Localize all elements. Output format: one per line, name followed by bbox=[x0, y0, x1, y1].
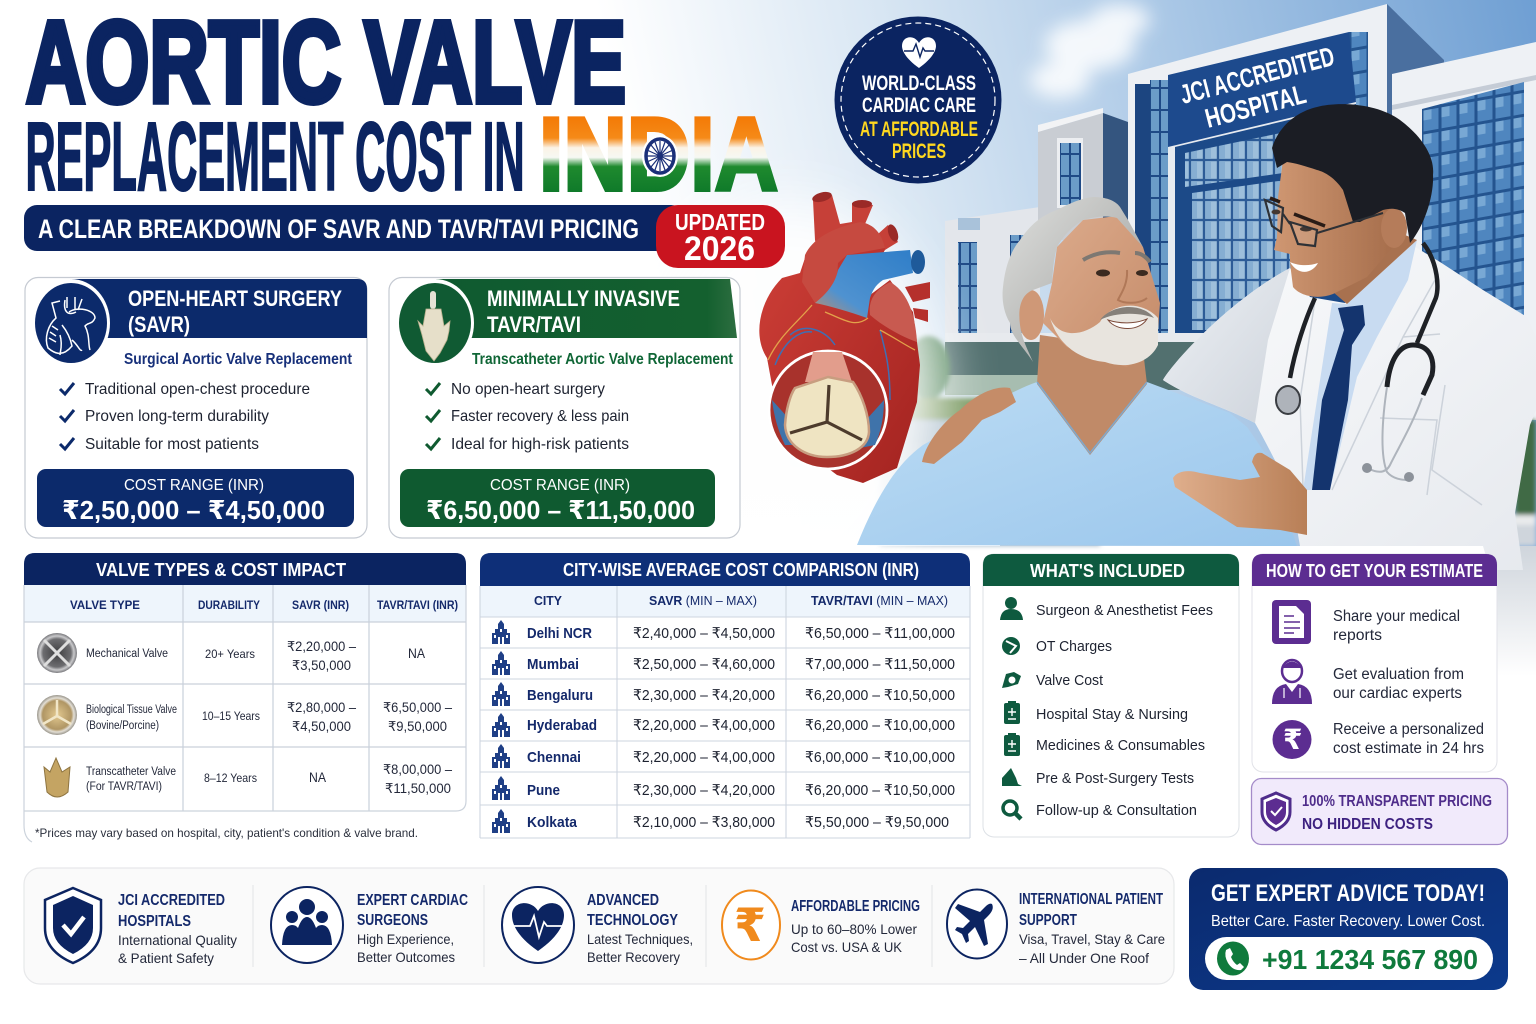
panel: trust strip bbox=[24, 868, 1174, 984]
table column headers: SAVR (INR) bbox=[292, 598, 349, 612]
city table heading bbox=[480, 553, 970, 586]
row: Chennai bbox=[492, 744, 955, 768]
icon: mechanical valve bbox=[37, 633, 77, 673]
table column headers: VALVE TYPE bbox=[70, 598, 140, 612]
TAVR benefit list bbox=[426, 381, 629, 453]
icon: shield bbox=[1262, 793, 1290, 830]
table heading bbox=[24, 553, 466, 585]
row: Delhi NCR: ₹2,40,000 – ₹4,50,000 bbox=[633, 625, 775, 642]
icon: rupee bbox=[1272, 720, 1312, 759]
table column headers: TAVR/TAVI (INR) bbox=[377, 598, 458, 612]
panel: how to get your estimate bbox=[1252, 554, 1497, 772]
hospital sign: HOSPITAL bbox=[1202, 79, 1309, 134]
row: Delhi NCR: Delhi NCR bbox=[527, 625, 592, 642]
row: Hyderabad bbox=[492, 713, 955, 737]
item: affordable pricing: AFFORDABLE PRICING bbox=[791, 898, 920, 915]
item: advanced technology: ADVANCED bbox=[587, 892, 659, 909]
row: Bengaluru: ₹6,20,000 – ₹10,50,000 bbox=[805, 687, 955, 704]
item: expert surgeons: High Experience, bbox=[357, 931, 454, 947]
included items: OT Charges bbox=[1036, 638, 1112, 655]
row: biological valve: ₹6,50,000 – bbox=[383, 700, 452, 715]
heart vessels bbox=[813, 195, 898, 300]
row: Bengaluru: ₹2,30,000 – ₹4,20,000 bbox=[633, 687, 775, 704]
item: advanced technology: Better Recovery bbox=[587, 949, 680, 965]
heart right lobe bbox=[870, 282, 917, 342]
illustration: doctor bbox=[1163, 104, 1536, 570]
row: Hyderabad: Hyderabad bbox=[527, 717, 597, 734]
pulmonary artery bbox=[815, 250, 913, 318]
patient ear bbox=[1018, 290, 1044, 340]
panel: TAVR card: TAVR/TAVI bbox=[487, 312, 581, 337]
row: transcatheter valve: NA bbox=[309, 769, 327, 785]
icon: follow-up magnifier bbox=[1003, 801, 1021, 819]
row: Kolkata bbox=[492, 809, 949, 833]
panel: SAVR card: (SAVR) bbox=[128, 312, 190, 337]
TAVR benefit list: Faster recovery & less pain bbox=[451, 408, 629, 425]
haze bbox=[640, 200, 940, 600]
SAVR subtitle: Surgical Aortic Valve Replacement bbox=[124, 351, 352, 368]
panel: what's included: WHAT'S INCLUDED bbox=[1030, 560, 1185, 581]
item: expert surgeons: SURGEONS bbox=[357, 912, 428, 929]
table column headers: DURABILITY bbox=[198, 598, 260, 612]
coronary vessels bbox=[775, 328, 890, 400]
icon: rupee: ₹ bbox=[1283, 724, 1302, 755]
row: transcatheter valve: ₹11,50,000 bbox=[385, 781, 451, 796]
callout: transparent pricing: 100% TRANSPARENT PRICING bbox=[1302, 793, 1492, 810]
item: international support: – All Under One Roof bbox=[1019, 950, 1149, 966]
included items: Pre & Post-Surgery Tests bbox=[1036, 770, 1194, 787]
row: biological valve: ₹4,50,000 bbox=[292, 719, 351, 734]
SAVR benefit list: Proven long-term durability bbox=[85, 408, 269, 425]
row: mechanical valve: ₹2,20,000 – bbox=[287, 639, 356, 654]
panel: city-wise table: CITY-WISE AVERAGE COST COMPARISON (INR) bbox=[563, 560, 919, 580]
row: Chennai: ₹6,00,000 – ₹10,00,000 bbox=[805, 749, 955, 766]
TAVR cost box bbox=[400, 469, 715, 527]
hair bbox=[1272, 104, 1433, 243]
icon: orange rupee bbox=[722, 890, 780, 960]
panel: valve types table: VALVE TYPES & COST IMPACT bbox=[96, 559, 347, 580]
panel: how to get your estimate: HOW TO GET YOUR ESTIMATE bbox=[1266, 560, 1483, 581]
row: biological valve bbox=[37, 695, 452, 735]
valve inset bbox=[769, 351, 887, 469]
icon: phone bbox=[1217, 942, 1249, 976]
TAVR header bbox=[436, 279, 737, 338]
row: Hyderabad: ₹2,20,000 – ₹4,00,000 bbox=[633, 717, 775, 734]
row: Pune: ₹2,30,000 – ₹4,20,000 bbox=[633, 782, 775, 799]
title line one: AORTIC VALVE bbox=[26, 0, 626, 127]
item: JCI accredited: JCI ACCREDITED bbox=[118, 892, 225, 909]
step: share reports: reports bbox=[1333, 627, 1382, 644]
included items: Medicines & Consumables bbox=[1036, 737, 1205, 754]
panel: call to action: Better Care. Faster Recovery. Lower Cost. bbox=[1211, 913, 1485, 930]
icon: OT charges bbox=[1002, 637, 1020, 655]
phone pill bbox=[1205, 937, 1493, 980]
icon: orange rupee: ₹ bbox=[734, 899, 766, 951]
neckline bbox=[1037, 382, 1147, 453]
doctor coat bbox=[1163, 245, 1536, 570]
city table column headers: SAVR (MIN – MAX) bbox=[649, 594, 757, 608]
icon: people bbox=[271, 887, 343, 963]
row: Mumbai: ₹2,50,000 – ₹4,60,000 bbox=[633, 656, 775, 673]
stethoscope bbox=[1276, 243, 1437, 482]
panel: SAVR card: OPEN-HEART SURGERY bbox=[128, 286, 342, 311]
badge: world-class care bbox=[834, 16, 1002, 184]
patient hair bbox=[1003, 197, 1143, 362]
step: evaluation bbox=[1272, 660, 1464, 704]
panel: TAVR card: MINIMALLY INVASIVE bbox=[487, 286, 680, 311]
callout: transparent pricing bbox=[1252, 778, 1508, 844]
included items: Hospital Stay & Nursing bbox=[1036, 706, 1188, 723]
item: advanced technology bbox=[502, 887, 693, 965]
badge: world-class care: CARDIAC CARE bbox=[862, 94, 976, 117]
included heading bbox=[983, 554, 1239, 586]
item: JCI accredited bbox=[45, 888, 237, 966]
subtitle banner: A CLEAR BREAKDOWN OF SAVR AND TAVR/TAVI PRICING bbox=[38, 214, 639, 244]
row: Delhi NCR bbox=[492, 620, 955, 644]
included items bbox=[1000, 597, 1213, 819]
item: expert surgeons bbox=[271, 887, 468, 965]
TAVR benefit list: No open-heart surgery bbox=[451, 381, 605, 398]
updated badge: 2026 bbox=[684, 230, 755, 268]
item: international support: Visa, Travel, Stay & Care bbox=[1019, 931, 1165, 947]
row: transcatheter valve: Transcatheter Valve bbox=[86, 766, 176, 778]
row: Kolkata: Kolkata bbox=[527, 814, 578, 831]
item: expert surgeons: Better Outcomes bbox=[357, 949, 455, 965]
row: Mumbai: ₹7,00,000 – ₹11,50,000 bbox=[805, 656, 955, 673]
badge: world-class care: WORLD-CLASS bbox=[862, 72, 976, 95]
panel: valve types table bbox=[24, 553, 466, 842]
panel: call to action bbox=[1189, 868, 1508, 990]
doctor features bbox=[1265, 198, 1383, 272]
aortic arch bbox=[802, 222, 885, 303]
row: Delhi NCR: ₹6,50,000 – ₹11,00,000 bbox=[805, 625, 955, 642]
row: Mumbai: Mumbai bbox=[527, 656, 579, 673]
icon: heart anatomy bbox=[32, 279, 110, 367]
title: REPLACEMENT COST IN bbox=[26, 102, 524, 211]
icon: document bbox=[1272, 600, 1311, 644]
tie bbox=[1312, 305, 1365, 490]
row: mechanical valve: ₹3,50,000 bbox=[292, 658, 351, 673]
row: Kolkata: ₹5,50,000 – ₹9,50,000 bbox=[805, 814, 949, 831]
coat seams bbox=[1300, 280, 1482, 505]
row: Bengaluru bbox=[492, 682, 955, 706]
step: estimate: cost estimate in 24 hrs bbox=[1333, 740, 1484, 757]
panel: TAVR card bbox=[389, 278, 740, 538]
badge: world-class care: AT AFFORDABLE bbox=[860, 118, 978, 141]
row: biological valve: ₹2,80,000 – bbox=[287, 700, 356, 715]
row: transcatheter valve: 8–12 Years bbox=[204, 771, 257, 785]
SAVR cost box bbox=[37, 469, 354, 527]
icon: transcatheter valve bbox=[396, 279, 474, 367]
phone pill: +91 1234 567 890 bbox=[1262, 944, 1478, 975]
grounds and trees bbox=[880, 336, 1536, 546]
city table column headers bbox=[534, 594, 948, 608]
updated badge bbox=[656, 205, 785, 268]
included items: Surgeon & Anesthetist Fees bbox=[1036, 602, 1213, 619]
city table column headers: TAVR/TAVI (MIN – MAX) bbox=[811, 594, 948, 608]
icon: shield check bbox=[45, 888, 101, 963]
step: evaluation: our cardiac experts bbox=[1333, 685, 1462, 702]
SAVR header bbox=[70, 279, 367, 338]
clouds bbox=[1030, 4, 1150, 98]
row: Pune: Pune bbox=[527, 782, 560, 799]
item: JCI accredited: & Patient Safety bbox=[118, 950, 214, 966]
row: mechanical valve: NA bbox=[408, 645, 426, 661]
row: Bengaluru: Bengaluru bbox=[527, 687, 593, 704]
table column headers bbox=[70, 598, 458, 612]
icon: crown valve bbox=[44, 758, 70, 797]
patient face bbox=[1043, 216, 1160, 367]
title india: INDIA bbox=[539, 97, 778, 213]
estimate heading bbox=[1252, 554, 1497, 586]
doctor gesturing hand bbox=[1173, 453, 1307, 535]
item: international support: SUPPORT bbox=[1019, 912, 1077, 929]
hero scene: sky and hospital bbox=[0, 0, 1536, 600]
icon: plane bbox=[947, 890, 1007, 958]
subtitle banner bbox=[24, 205, 684, 251]
hospital building left tower bbox=[1038, 108, 1128, 240]
patient beard bbox=[1050, 306, 1158, 365]
heart body bbox=[759, 222, 920, 483]
icon: clipboard medicines bbox=[1004, 733, 1020, 756]
item: advanced technology: Latest Techniques, bbox=[587, 931, 693, 947]
panel: what's included bbox=[983, 554, 1239, 837]
row: biological valve: 10–15 Years bbox=[202, 709, 260, 723]
city table column headers: CITY bbox=[534, 594, 563, 608]
row: Hyderabad: ₹6,20,000 – ₹10,00,000 bbox=[805, 717, 955, 734]
callout: transparent pricing: NO HIDDEN COSTS bbox=[1302, 816, 1433, 833]
SAVR benefit list: Traditional open-chest procedure bbox=[85, 381, 310, 398]
illustration: heart with valve inset bbox=[759, 190, 930, 483]
hospital sign bbox=[1168, 32, 1356, 147]
row: Pune: ₹6,20,000 – ₹10,50,000 bbox=[805, 782, 955, 799]
icon: tissue valve bbox=[37, 695, 77, 735]
patient neck bbox=[1037, 335, 1147, 455]
included items: Valve Cost bbox=[1036, 672, 1104, 689]
icon: doctor bbox=[1272, 660, 1312, 704]
hospital sign: JCI ACCREDITED bbox=[1177, 41, 1337, 110]
item: advanced technology: TECHNOLOGY bbox=[587, 912, 678, 929]
item: JCI accredited: International Quality bbox=[118, 932, 237, 948]
row: transcatheter valve: (For TAVR/TAVI) bbox=[86, 781, 162, 793]
neck bbox=[1333, 230, 1417, 304]
row: biological valve: Biological Tissue Valve bbox=[86, 704, 177, 716]
hospital ground floor bbox=[945, 333, 1245, 395]
row: transcatheter valve bbox=[44, 758, 452, 797]
icon: clipboard bbox=[1004, 701, 1020, 724]
icon: ashoka chakra bbox=[642, 135, 678, 177]
item: international support bbox=[947, 890, 1165, 966]
updated badge: UPDATED bbox=[675, 209, 765, 235]
row: mechanical valve bbox=[37, 633, 426, 673]
SAVR benefit list: Suitable for most patients bbox=[85, 436, 259, 453]
SAVR benefit list bbox=[60, 381, 310, 453]
icon: heart pulse bbox=[902, 37, 936, 68]
hospital right wing bbox=[1392, 42, 1536, 420]
panel: city-wise table bbox=[480, 553, 970, 838]
footnote: *Prices may vary based on hospital, city, patient's condition & valve brand. bbox=[35, 826, 418, 840]
step: estimate: Receive a personalized bbox=[1333, 721, 1484, 738]
step: share reports: Share your medical bbox=[1333, 608, 1460, 625]
TAVR benefit list: Ideal for high-risk patients bbox=[451, 436, 629, 453]
shirt bbox=[1303, 240, 1417, 490]
icon: heart pulse circle bbox=[502, 887, 574, 963]
icon: tests bbox=[1002, 768, 1022, 786]
badge: world-class care: PRICES bbox=[892, 140, 946, 163]
row: transcatheter valve: ₹8,00,000 – bbox=[383, 762, 452, 777]
step: estimate bbox=[1272, 720, 1484, 759]
SAVR cost box: COST RANGE (INR) bbox=[124, 477, 264, 494]
TAVR cost box: ₹6,50,000 – ₹11,50,000 bbox=[426, 495, 695, 525]
illustration: patient bbox=[857, 197, 1307, 546]
row: Kolkata: ₹2,10,000 – ₹3,80,000 bbox=[633, 814, 775, 831]
item: affordable pricing: Up to 60–80% Lower bbox=[791, 921, 917, 937]
hospital main block bbox=[1128, 4, 1444, 340]
row: mechanical valve: Mechanical Valve bbox=[86, 648, 168, 660]
TAVR cost box: COST RANGE (INR) bbox=[490, 477, 630, 494]
row: Mumbai bbox=[492, 651, 955, 675]
doctor hand on shoulder bbox=[922, 387, 1016, 464]
item: affordable pricing: Cost vs. USA & UK bbox=[791, 939, 903, 955]
item: affordable pricing bbox=[722, 890, 920, 960]
row: Chennai: Chennai bbox=[527, 749, 581, 766]
item: JCI accredited: HOSPITALS bbox=[118, 913, 191, 930]
TAVR subtitle: Transcatheter Aortic Valve Replacement bbox=[472, 351, 733, 368]
patient gown bbox=[857, 382, 1297, 546]
panel: SAVR card bbox=[25, 278, 367, 538]
row: mechanical valve: 20+ Years bbox=[205, 647, 255, 661]
item: expert surgeons: EXPERT CARDIAC bbox=[357, 892, 468, 909]
SAVR cost box: ₹2,50,000 – ₹4,50,000 bbox=[62, 495, 325, 525]
row: Pune bbox=[492, 776, 955, 800]
doctor sleeve shading bbox=[1163, 268, 1290, 423]
step: share reports bbox=[1272, 600, 1460, 644]
row: biological valve: (Bovine/Porcine) bbox=[86, 720, 159, 732]
included items: Follow-up & Consultation bbox=[1036, 802, 1197, 819]
face bbox=[1274, 160, 1400, 297]
row: Chennai: ₹2,20,000 – ₹4,00,000 bbox=[633, 749, 775, 766]
item: international support: INTERNATIONAL PATIENT bbox=[1019, 891, 1163, 908]
icon: surgeon bbox=[1000, 597, 1023, 620]
title bbox=[26, 0, 778, 213]
hospital building lower-left wing bbox=[945, 207, 1040, 375]
patient features bbox=[1083, 252, 1154, 329]
row: biological valve: ₹9,50,000 bbox=[388, 719, 447, 734]
icon: valve bbox=[1002, 672, 1021, 688]
step: evaluation: Get evaluation from bbox=[1333, 666, 1464, 683]
